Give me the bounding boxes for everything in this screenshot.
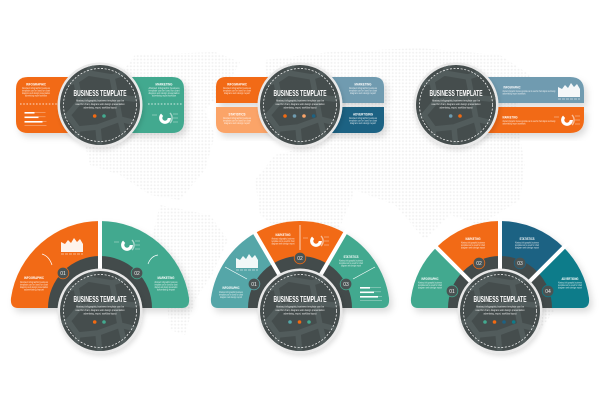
icon: area chart — [61, 238, 83, 254]
central disc — [456, 267, 544, 355]
text: marketing: MARKETING — [354, 82, 372, 86]
text: marketing: template can be used for chart — [349, 90, 377, 92]
icon: area chart — [236, 254, 258, 270]
dark inner ring — [48, 256, 152, 308]
text: marketing — [154, 276, 178, 292]
central disc — [256, 267, 344, 355]
central disc: BUSINESS TEMPLATE — [274, 294, 327, 304]
text: infographic — [219, 286, 244, 299]
box: marketing teal — [120, 77, 184, 133]
sector gaps — [252, 228, 348, 276]
icon: area chart — [558, 83, 580, 99]
icon: bars — [24, 112, 46, 126]
badge 01 — [57, 267, 69, 279]
text: advertising: ADVERTISING — [353, 112, 373, 116]
sectors — [211, 221, 389, 311]
text: marketing: template can be used for chart — [154, 284, 178, 286]
text: infographic: advertising report workflow — [502, 92, 526, 96]
text: statistics — [223, 112, 252, 125]
text: marketing — [349, 82, 378, 95]
icon: donut chart — [554, 115, 580, 125]
central disc: advertising, report, workflow layout — [284, 106, 317, 110]
text: advertising: template can be used for chart — [349, 120, 377, 122]
text: infographic: template can be used for chart — [418, 284, 442, 287]
badge 01 — [446, 285, 458, 297]
text: marketing: diagram web design report — [461, 246, 485, 250]
bar: infographic blue grey — [470, 77, 584, 103]
central disc: advertising, report, workflow layout — [284, 312, 317, 316]
text: marketing block: diagram web design presentation — [148, 92, 180, 95]
central disc: Abstract infographic business template can be — [432, 98, 480, 102]
text: advertising — [558, 277, 583, 290]
text: marketing block: advertising report workflow — [152, 94, 176, 98]
badge 01: 01 — [60, 271, 66, 277]
central disc: BUSINESS TEMPLATE — [74, 294, 127, 304]
text: infographic: Abstract infographic business — [20, 281, 49, 284]
text: marketing block: Abstract infographic business — [148, 87, 180, 90]
badge 01: 01 — [449, 289, 455, 295]
text: marketing block: template can be used for chart — [148, 90, 180, 92]
text: marketing: MARKETING — [276, 233, 291, 237]
central disc: used for chart, diagram web design presentation — [76, 308, 125, 312]
panel: two-item infographic — [16, 61, 184, 149]
central disc: Abstract infographic business template can be — [76, 304, 124, 308]
icon: bars — [360, 287, 382, 301]
text: statistics: Abstract infographic business — [515, 242, 540, 244]
text: advertising: ADVERTISING — [562, 277, 579, 281]
text: infographic: advertising report — [24, 288, 44, 292]
text: marketing: diagram web design report — [272, 242, 295, 246]
text: statistics: template can be used for chart — [339, 262, 363, 265]
text: marketing — [272, 233, 295, 246]
text: infographic: Abstract infographic business — [223, 87, 252, 90]
panel: four-item infographic — [216, 61, 384, 149]
sectors — [411, 221, 589, 311]
sectors — [11, 221, 189, 308]
icon: donut chart — [303, 236, 329, 246]
text: infographic: Abstract infographic business — [219, 291, 244, 294]
panel: three-sector fan — [211, 221, 389, 355]
text: statistics: diagram web design report — [341, 264, 361, 268]
text: statistics: diagram web design report — [515, 246, 539, 250]
text: infographic — [223, 82, 252, 95]
sector gaps — [432, 215, 568, 283]
box: statistics light orange — [216, 107, 280, 133]
central disc: BUSINESS TEMPLATE — [74, 88, 127, 98]
text: marketing: template can be used for chart — [272, 240, 295, 243]
badge 02: 02 — [476, 261, 482, 267]
text: marketing: MARKETING — [466, 237, 481, 241]
text: marketing block: MARKETING — [156, 82, 173, 86]
box: marketing blue grey — [320, 77, 384, 103]
badge 03 — [340, 278, 352, 290]
background dotted world map — [85, 48, 555, 335]
central disc: used for chart, diagram web design presentation — [276, 102, 325, 106]
text: infographic block — [22, 82, 51, 98]
text: infographic — [20, 276, 49, 292]
central disc — [56, 61, 144, 149]
box: infographic orange — [216, 77, 280, 103]
text: advertising — [349, 112, 378, 125]
badge 02 — [131, 267, 143, 279]
icon: donut chart — [152, 113, 178, 123]
central disc — [256, 61, 344, 149]
text: advertising: Abstract infographic business — [558, 282, 583, 284]
text: marketing block — [148, 82, 180, 98]
text: infographic: INFOGRAPHIC — [222, 286, 240, 290]
text: statistics: template can be used for chart — [223, 120, 251, 122]
text: marketing: diagram web design presentation — [154, 286, 178, 289]
dark inner ring — [248, 256, 352, 308]
text: statistics: Abstract infographic business — [223, 117, 252, 120]
text: infographic: diagram web design report — [418, 286, 442, 290]
text: marketing — [461, 237, 486, 250]
text: advertising: diagram web design report — [558, 286, 582, 290]
central disc: advertising, report, workflow layout — [440, 106, 473, 110]
badge 01: 01 — [251, 282, 257, 288]
central disc: Abstract infographic business template can be — [276, 304, 324, 308]
text: statistics: diagram web design report — [224, 122, 250, 125]
text: marketing: advertising report workflow — [502, 122, 526, 126]
dashed separator — [148, 103, 182, 105]
text: marketing: MARKETING — [502, 116, 518, 120]
text: infographic — [502, 86, 556, 96]
central disc: used for chart, diagram web design presentation — [276, 308, 325, 312]
text: infographic block: INFOGRAPHIC — [26, 82, 46, 86]
text: statistics: Abstract infographic business — [339, 260, 364, 262]
text: statistics: STATISTICS — [344, 255, 359, 259]
icon: donut chart — [114, 240, 140, 250]
text: infographic: INFOGRAPHIC — [504, 86, 521, 90]
text: marketing — [502, 116, 556, 126]
badge 01 — [248, 278, 260, 290]
text: infographic: Abstract infographic business template can be used for chart diagram web design — [502, 90, 556, 93]
badge 03: 03 — [517, 261, 523, 267]
central disc: BUSINESS TEMPLATE — [430, 88, 483, 98]
badge 02 — [294, 252, 306, 264]
text: statistics: STATISTICS — [228, 112, 246, 116]
text: marketing: template can be used for chart — [461, 244, 485, 247]
curved connector right — [148, 255, 158, 264]
text: infographic: INFOGRAPHIC — [24, 276, 44, 280]
badge 02 — [473, 257, 485, 269]
text: marketing: MARKETING — [158, 276, 175, 280]
text: infographic: diagram web design report — [224, 92, 250, 95]
text: marketing: Abstract infographic business — [154, 281, 178, 284]
text: infographic: template can be used for chart — [219, 294, 243, 296]
text: infographic block: template can be used for chart — [22, 90, 50, 92]
central disc: Abstract infographic business template can be — [76, 98, 124, 102]
central disc — [412, 61, 500, 149]
text: statistics — [515, 237, 540, 250]
text: infographic: diagram web design report — [220, 296, 242, 299]
text: advertising: Abstract infographic business — [349, 117, 378, 120]
text: infographic: template can be used for chart — [223, 90, 251, 92]
text: infographic — [418, 277, 443, 290]
panel: two-sector fan — [11, 215, 189, 355]
text: infographic block: advertising report workflow — [25, 94, 47, 98]
dark inner ring — [448, 256, 552, 308]
panel: four-sector fan — [411, 215, 589, 355]
text: infographic: Abstract infographic business — [418, 282, 443, 284]
badge 02: 02 — [134, 271, 140, 277]
central disc: Abstract infographic business template can be — [276, 98, 324, 102]
text: infographic: INFOGRAPHIC — [227, 82, 247, 86]
badge 02: 02 — [297, 256, 303, 262]
dashed separator — [20, 103, 62, 105]
divider lines — [225, 225, 375, 279]
badge 03 — [514, 257, 526, 269]
text: infographic block: Abstract infographic business — [22, 87, 51, 90]
text: infographic: INFOGRAPHIC — [422, 277, 439, 281]
text: infographic block: diagram web design presentation — [22, 92, 50, 95]
text: marketing: Abstract infographic business — [349, 87, 378, 90]
badge 03: 03 — [343, 282, 349, 288]
text: statistics: STATISTICS — [520, 237, 535, 241]
text: marketing: diagram web design report — [350, 92, 376, 95]
central disc: used for chart, diagram web design presentation — [432, 102, 481, 106]
text: advertising: template can be used for chart — [558, 284, 582, 287]
central disc — [56, 267, 144, 355]
central disc: Abstract infographic business template can be — [476, 304, 524, 308]
text: infographic: diagram web design presentation — [20, 286, 48, 289]
sector gap — [98, 215, 102, 272]
central disc: BUSINESS TEMPLATE — [274, 88, 327, 98]
badge 04: 04 — [545, 289, 551, 295]
bar: marketing orange — [470, 107, 584, 133]
text: statistics: template can be used for chart — [515, 244, 539, 247]
central disc: BUSINESS TEMPLATE — [474, 294, 527, 304]
box: advertising dark blue — [320, 107, 384, 133]
panel: two-bar infographic — [412, 61, 584, 149]
text: marketing: Abstract infographic business — [272, 238, 295, 240]
central disc: advertising, report, workflow layout — [84, 312, 117, 316]
central disc: advertising, report, workflow layout — [84, 106, 117, 110]
central disc: used for chart, diagram web design presentation — [76, 102, 125, 106]
curved connector left — [42, 254, 52, 265]
central disc: used for chart, diagram web design presentation — [476, 308, 525, 312]
box: infographic orange — [16, 77, 80, 133]
badge 04 — [542, 285, 554, 297]
text: statistics — [339, 255, 364, 268]
text: advertising: diagram web design report — [350, 122, 376, 125]
central disc: advertising, report, workflow layout — [484, 312, 517, 316]
text: marketing: Abstract infographic business template can be used for chart diagram web design — [502, 120, 556, 123]
text: marketing: advertising report — [157, 288, 175, 292]
text: marketing: Abstract infographic business — [461, 242, 486, 244]
text: infographic: template can be used for chart — [20, 284, 48, 286]
